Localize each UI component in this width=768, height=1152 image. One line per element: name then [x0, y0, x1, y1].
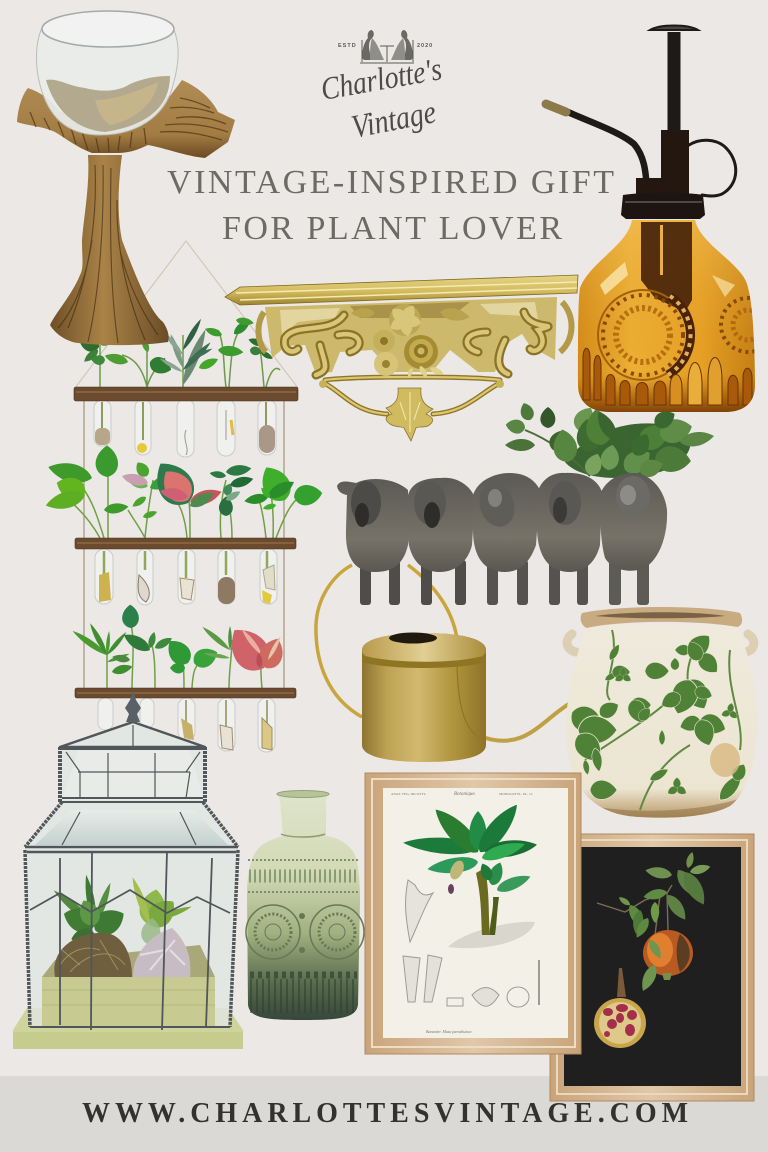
finial	[125, 690, 141, 722]
logo: Charlotte's	[318, 50, 444, 107]
metal frame	[25, 722, 238, 1030]
wooden box	[42, 977, 215, 1027]
branch and leaves	[597, 851, 711, 940]
logo	[318, 30, 444, 146]
logo: Vintage	[349, 94, 439, 146]
mushroom brass stand with glass bowl	[17, 11, 235, 345]
can body	[362, 633, 486, 762]
pot rim	[581, 607, 742, 628]
wooden box back	[42, 945, 215, 977]
row 1 tubes	[94, 399, 276, 457]
whole pomegranate	[638, 930, 693, 993]
can handle	[316, 565, 458, 717]
pot ears	[567, 634, 754, 652]
hanging plant rack with test tubes	[44, 241, 324, 752]
moss and rock	[54, 933, 132, 977]
logo figures	[360, 30, 414, 63]
sheep 2	[407, 478, 475, 605]
print header: Bananier. Musa paradisiaca	[426, 1029, 471, 1034]
website url: WWW.CHARLOTTESVINTAGE.COM	[82, 1098, 688, 1129]
glass panels	[25, 722, 238, 1027]
print header: ANAT. VEG. DICOTYL.	[391, 792, 427, 796]
floral ceramic pot	[566, 607, 757, 825]
pot body	[566, 625, 757, 818]
row 2 tubes	[95, 549, 277, 605]
shelf scrolls	[284, 312, 548, 414]
mister collar	[621, 193, 705, 219]
succulent plant	[505, 401, 715, 480]
sheep 3	[473, 473, 540, 605]
cut pomegranate	[594, 968, 646, 1048]
print header	[391, 792, 533, 1034]
footer band	[0, 1076, 768, 1152]
dark canvas	[564, 847, 741, 1086]
title	[167, 164, 614, 247]
sheep 5	[600, 473, 667, 605]
mushroom stem	[50, 155, 169, 345]
row 3 plants	[71, 604, 288, 688]
mister pump and spout	[546, 26, 736, 196]
frame	[365, 773, 581, 1054]
can spout	[476, 702, 572, 741]
row 2 plants	[44, 446, 324, 538]
row 3 tubes	[98, 698, 275, 752]
gold ornate wall shelf	[225, 275, 578, 441]
row of grey sheep planter	[337, 473, 667, 605]
frame	[550, 834, 754, 1101]
gold watering can	[316, 565, 572, 762]
title: FOR PLANT LOVER	[222, 210, 562, 247]
amber glass plant mister	[546, 26, 768, 415]
flower sketches	[403, 880, 539, 1007]
amber bottle	[578, 220, 755, 412]
logo: ESTD	[338, 43, 357, 49]
shelf finial	[386, 388, 433, 441]
glass bowl	[36, 11, 178, 135]
print header: Botanique.	[454, 792, 476, 797]
shelf back panel and brackets	[265, 297, 557, 374]
sheep 1	[337, 479, 408, 605]
tray	[13, 1008, 243, 1049]
framed banana tree botanical print	[365, 773, 581, 1054]
terrarium glass house	[13, 690, 243, 1049]
wooden bars	[74, 387, 298, 698]
mister body	[636, 130, 689, 195]
shelf flowers	[351, 303, 471, 379]
shelf top	[225, 275, 578, 305]
green embossed glass vase	[246, 790, 364, 1020]
row 1 plants	[77, 316, 280, 387]
banana tree	[403, 799, 538, 948]
framed pomegranate print	[550, 834, 754, 1101]
terrarium plants	[51, 874, 193, 948]
mushroom cap	[17, 80, 235, 158]
print header: MONOCOTYL. PL. 12	[499, 792, 533, 796]
title: VINTAGE-INSPIRED GIFT	[167, 164, 614, 201]
sheep 4	[537, 473, 602, 605]
logo: 2020	[417, 43, 433, 49]
print paper	[383, 788, 568, 1038]
